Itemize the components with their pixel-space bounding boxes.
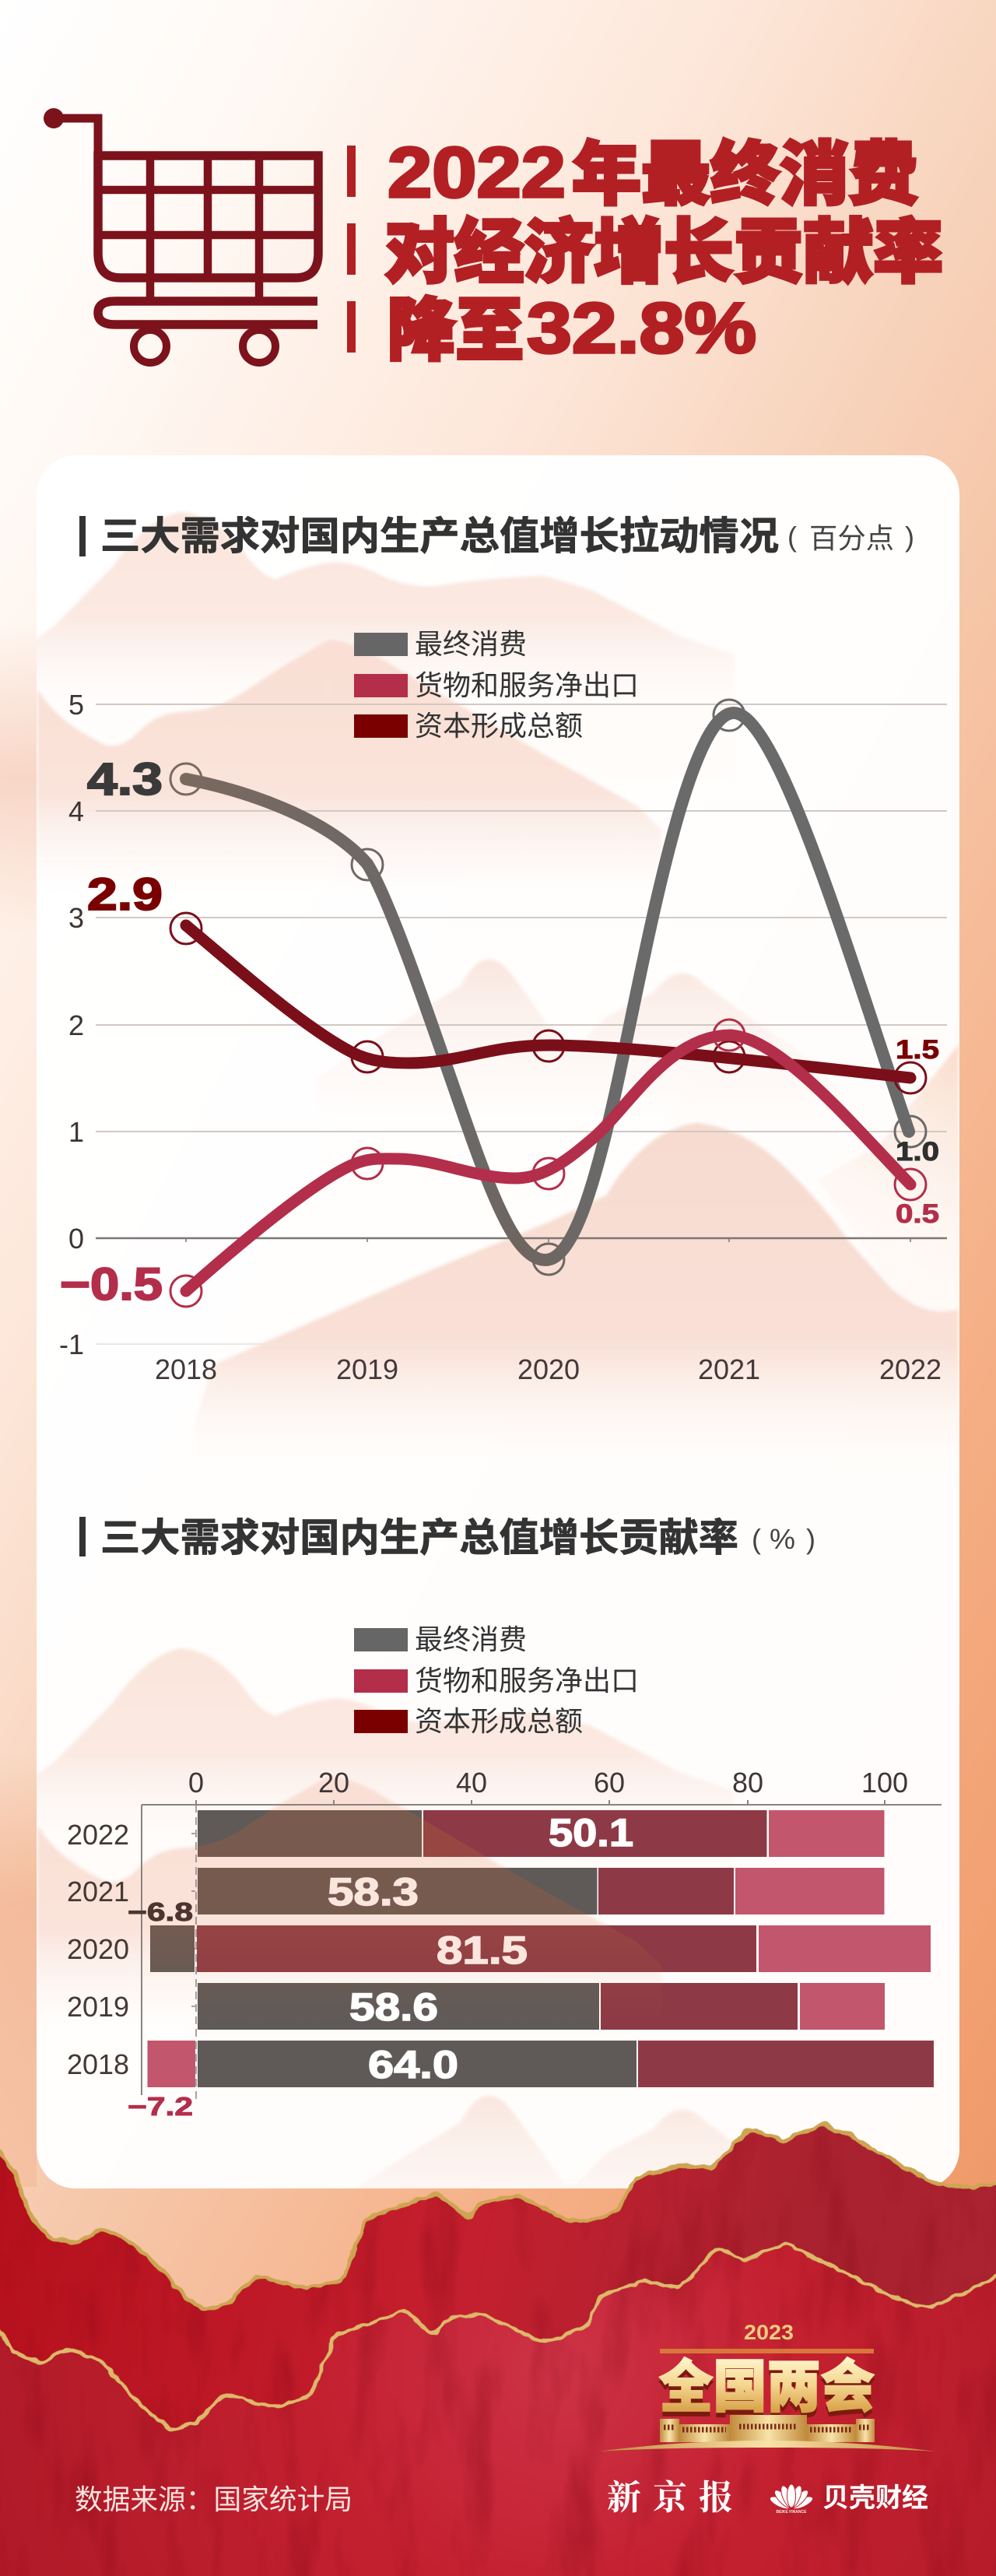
bar value labels: 81.5 <box>437 1928 528 1972</box>
heading: line chart: 三大需求对国内生产总值增长拉动情况 <box>100 514 779 558</box>
row 2020 <box>150 1925 931 1972</box>
heading: bar chart: ( <box>752 1523 761 1555</box>
year labels: 2018 <box>67 2048 129 2080</box>
y axis labels: 3 <box>68 902 84 934</box>
x axis labels: 2021 <box>698 1353 760 1385</box>
logo: 2023 national two sessions: 2023 <box>744 2321 794 2344</box>
series: net exports <box>170 1020 926 1307</box>
row 2021 <box>198 1868 884 1914</box>
title: 2022 <box>388 133 566 212</box>
logo: 2023 national two sessions <box>598 2321 936 2451</box>
mountains inside panel <box>31 512 959 2304</box>
series: final consumption <box>170 700 926 1275</box>
bar value labels: 58.3 <box>328 1870 419 1914</box>
legend: bar chart: 最终消费 <box>415 1623 527 1655</box>
x axis labels: 2019 <box>336 1353 398 1385</box>
legend: line chart <box>354 628 639 742</box>
row 2018 <box>148 2041 934 2087</box>
year labels <box>67 1819 129 2080</box>
heading: line chart: 百分点 <box>809 522 894 554</box>
axes <box>142 1800 942 2101</box>
top axis labels: 40 <box>456 1767 487 1799</box>
row 2022 <box>198 1810 884 1857</box>
bar chart <box>37 1767 942 2121</box>
y axis labels: 1 <box>68 1116 84 1148</box>
top axis labels <box>188 1767 908 1799</box>
logo: Beijing News: 新京报 <box>607 2479 745 2517</box>
legend: line chart: 货物和服务净出口 <box>415 669 639 701</box>
top axis labels: 0 <box>188 1767 204 1799</box>
x axis labels: 2020 <box>517 1353 580 1385</box>
title: 32.8% <box>527 289 756 368</box>
top axis labels: 100 <box>861 1767 908 1799</box>
negative value labels <box>128 1897 193 2121</box>
data labels: 1.5 <box>896 1035 939 1065</box>
title <box>347 133 943 369</box>
logo: 2023 national two sessions: 全国两会 <box>659 2356 875 2419</box>
icon: shell: BEIKE FINANCE <box>777 2510 807 2515</box>
panel: white card <box>37 455 959 2188</box>
footer: red mountains lower layer <box>0 2245 996 2576</box>
y axis labels: -1 <box>59 1328 84 1360</box>
legend: line chart: 最终消费 <box>415 628 527 660</box>
source note: 数据来源：国家统计局 <box>75 2483 352 2515</box>
y axis labels: 4 <box>68 795 84 827</box>
y axis labels: 0 <box>68 1223 84 1255</box>
bar value labels: 64.0 <box>368 2043 458 2086</box>
footer: red mountains upper layer <box>0 2125 996 2576</box>
year labels: 2022 <box>67 1819 129 1851</box>
series: capital formation <box>170 913 926 1093</box>
icon: great hall building <box>598 2415 936 2451</box>
logo: 2023 national two sessions: 全国两会 <box>659 2360 875 2423</box>
y axis labels: 2 <box>68 1009 84 1041</box>
x axis labels: 2018 <box>155 1353 217 1385</box>
year labels: 2021 <box>67 1876 129 1907</box>
y axis labels <box>59 689 84 1360</box>
data labels: 1.0 <box>896 1137 939 1167</box>
legend: line chart: 资本形成总额 <box>415 710 583 742</box>
bar value labels: 50.1 <box>549 1811 633 1855</box>
data labels: 0.5 <box>896 1199 939 1229</box>
top axis labels: 20 <box>318 1767 349 1799</box>
logo: Beike Finance: 贝壳财经 <box>822 2483 928 2513</box>
bar value labels: 58.6 <box>349 1985 438 2029</box>
mountain tint on bars <box>150 1810 635 1985</box>
row 2019 <box>198 1983 885 2030</box>
title: 降至 <box>388 292 524 369</box>
x axis labels <box>155 1353 942 1385</box>
title: 年最终消费 <box>572 135 918 213</box>
heading: bar chart: ) <box>806 1523 815 1555</box>
heading: line chart: ) <box>905 521 914 553</box>
legend: bar chart: 货物和服务净出口 <box>415 1665 639 1697</box>
data labels <box>60 754 939 1310</box>
heading: bar chart: % <box>770 1523 795 1555</box>
top axis labels: 80 <box>732 1767 763 1799</box>
heading: bar chart: 三大需求对国内生产总值增长贡献率 <box>100 1516 738 1560</box>
icon: shopping cart <box>44 108 318 363</box>
grid lines <box>96 704 947 1344</box>
year labels: 2020 <box>67 1933 129 1965</box>
legend: bar chart: 资本形成总额 <box>415 1705 583 1737</box>
data labels: 4.3 <box>87 754 163 805</box>
heading: line chart: ( <box>787 521 797 553</box>
line chart <box>59 689 947 1385</box>
y axis labels: 5 <box>68 689 84 721</box>
data labels: −0.5 <box>60 1259 163 1310</box>
top axis labels: 60 <box>594 1767 625 1799</box>
legend: bar chart <box>354 1623 639 1737</box>
title: 对经济增长贡献率 <box>384 214 943 292</box>
negative value labels: −7.2 <box>128 2092 193 2121</box>
bar value labels <box>328 1811 633 2086</box>
data labels: 2.9 <box>87 869 163 920</box>
x axis labels: 2022 <box>879 1353 942 1385</box>
icon: shell <box>768 2484 815 2515</box>
negative value labels: −6.8 <box>128 1897 193 1926</box>
year labels: 2019 <box>67 1991 129 2023</box>
